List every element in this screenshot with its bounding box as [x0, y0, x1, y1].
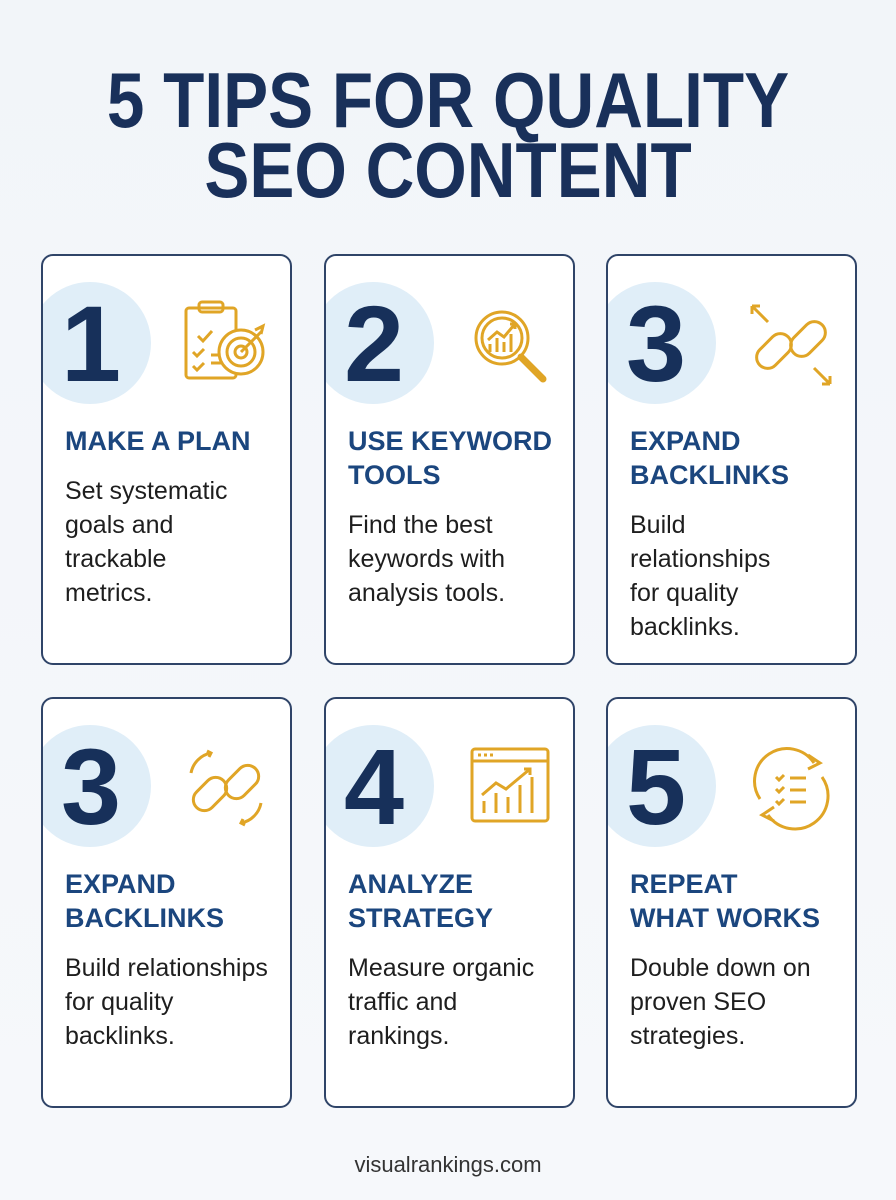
- body: for quality: [630, 579, 738, 607]
- body: keywords with: [348, 545, 505, 573]
- body: [630, 954, 811, 1050]
- heading: TOOLS: [348, 460, 441, 490]
- card 5: analyze strategy: [324, 697, 575, 1108]
- heading: EXPAND: [630, 426, 741, 456]
- body: [630, 511, 770, 641]
- heading: [630, 869, 820, 933]
- icon: clipboard target: [184, 300, 266, 380]
- body: Set systematic: [65, 477, 228, 505]
- body: proven SEO: [630, 988, 766, 1016]
- icon: chain with arrows: [750, 304, 832, 386]
- heading: [65, 869, 224, 933]
- heading: [630, 426, 789, 490]
- title: [107, 56, 789, 214]
- icon: cycle checklist: [753, 747, 830, 830]
- icon: browser chart: [470, 748, 550, 822]
- number 5: 5: [626, 726, 686, 847]
- icon: chain with curved arrows: [190, 750, 262, 826]
- card 1: make a plan: [41, 254, 292, 665]
- number 1: 1: [61, 283, 121, 404]
- body: trackable: [65, 545, 166, 573]
- card 2: keyword tools: [324, 254, 575, 665]
- body: goals and: [65, 511, 173, 539]
- body: strategies.: [630, 1022, 745, 1050]
- number 3: 3: [626, 283, 686, 404]
- number 3: 3: [61, 726, 121, 847]
- body: backlinks.: [630, 613, 740, 641]
- icon: magnifier chart: [474, 310, 546, 382]
- body: rankings.: [348, 1022, 449, 1050]
- heading: STRATEGY: [348, 903, 493, 933]
- body: for quality: [65, 988, 173, 1016]
- card 6: repeat what works: [606, 697, 857, 1108]
- footer: visualrankings.com: [354, 1152, 542, 1177]
- number 4: 4: [344, 726, 404, 847]
- heading: USE KEYWORD: [348, 426, 552, 456]
- body: Double down on: [630, 954, 811, 982]
- body: [65, 954, 268, 1050]
- number 2: 2: [344, 283, 404, 404]
- heading: MAKE A PLAN: [65, 426, 250, 456]
- heading: BACKLINKS: [630, 460, 789, 490]
- body: [348, 511, 505, 607]
- body: relationships: [630, 545, 770, 573]
- body: Build relationships: [65, 954, 268, 982]
- heading: ANALYZE: [348, 869, 473, 899]
- body: Find the best: [348, 511, 493, 539]
- heading: WHAT WORKS: [630, 903, 820, 933]
- body: Build: [630, 511, 686, 539]
- text: SEO CONTENT: [204, 126, 692, 214]
- heading: BACKLINKS: [65, 903, 224, 933]
- body: metrics.: [65, 579, 152, 607]
- heading: [348, 426, 552, 490]
- body: analysis tools.: [348, 579, 505, 607]
- card 3: expand backlinks: [606, 254, 857, 665]
- heading: EXPAND: [65, 869, 176, 899]
- card 4: expand backlinks: [41, 697, 292, 1108]
- text: 5 TIPS FOR QUALITY: [107, 56, 789, 144]
- body: traffic and: [348, 988, 457, 1016]
- heading: [348, 869, 493, 933]
- body: [348, 954, 534, 1050]
- heading: REPEAT: [630, 869, 738, 899]
- body: Measure organic: [348, 954, 534, 982]
- body: backlinks.: [65, 1022, 175, 1050]
- body: [65, 477, 228, 607]
